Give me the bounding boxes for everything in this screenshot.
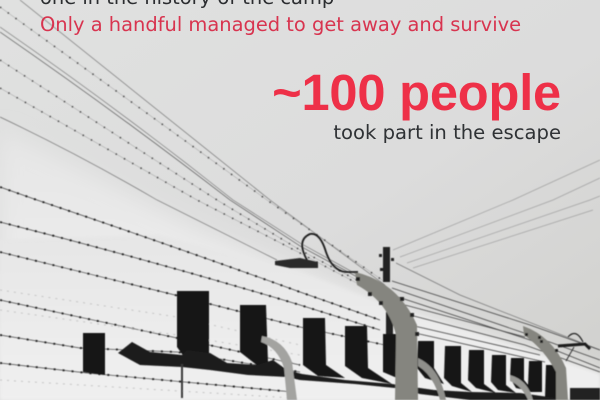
right wires [393,160,600,350]
big number: ~100 people: ~100 people [272,64,561,121]
fence post 5 [510,375,533,400]
snowy roof [0,130,600,400]
lamp and cable left [275,234,358,272]
dark building corner [570,388,600,400]
fence post 1 [261,336,297,400]
upper left barbed wires [0,7,385,298]
faint distant wires [0,290,300,398]
thin post [181,364,183,398]
text: took part in the escape: took part in the escape [333,121,561,144]
roof ridge shadow [118,342,570,400]
fence post 3 [418,358,446,400]
barrack chimneys with diagonal shadows [83,291,556,398]
lamp and cable right [558,333,590,361]
telegraph pole [379,247,394,336]
lower barbed wires [0,187,385,392]
upper left thin wires [0,0,385,292]
text: red subheading: Only a handful managed to get away and survive [40,13,521,36]
post insulators [356,277,558,352]
fence post 4 [523,326,568,400]
fence post 2: main concrete hook [355,272,418,400]
